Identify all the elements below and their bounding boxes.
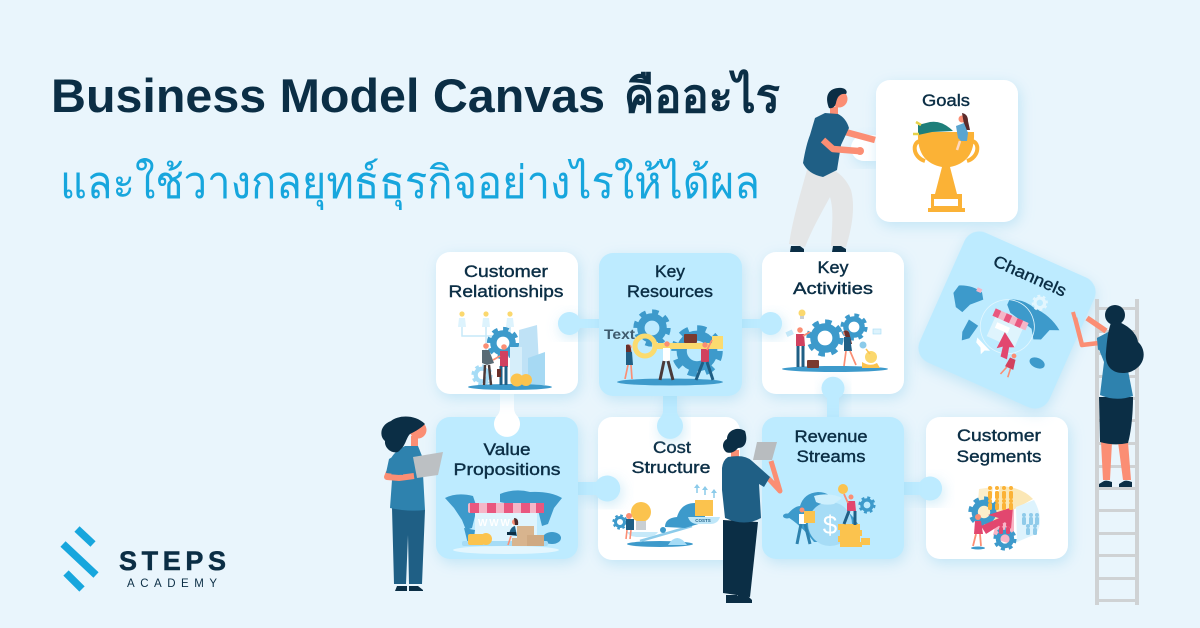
panel: key resources: Key: [655, 263, 686, 281]
panel: value propositions: [436, 417, 620, 559]
logo: Steps Academy: [63, 529, 226, 590]
panel: cost structure: Cost: [653, 439, 691, 457]
title: คืออะไร: [624, 68, 780, 122]
panel: cost structure: [598, 417, 740, 560]
icon: web store on world map: WWW.: [478, 518, 514, 529]
ladder: [1095, 299, 1139, 605]
icon: trophy: [913, 113, 977, 212]
panel: customer relationships: Relationships: [448, 283, 564, 301]
panel: revenue streams: [762, 377, 942, 559]
subtitle: และใช้วางกลยุทธ์ธุรกิจอย่างไรให้ได้ผล: [60, 157, 760, 210]
icon: segments pie: [970, 486, 1040, 550]
panel: channels: Channels: [990, 252, 1069, 301]
person: man pushing goals: [789, 88, 875, 252]
panel: customer relationships: Customer: [464, 263, 549, 281]
logo: Steps Academy: ACADEMY: [127, 578, 217, 590]
icon: money bag: [783, 484, 874, 547]
panel: revenue streams: Streams: [796, 448, 866, 466]
panel: customer segments: Customer: [957, 427, 1042, 445]
panel: goals: Goals: [922, 92, 970, 110]
person: woman on ladder: [1073, 305, 1144, 487]
icon: web store on world map: [445, 490, 562, 554]
panel: key resources: [558, 253, 782, 439]
panel: value propositions: Value: [484, 441, 530, 459]
panel: channels: [913, 226, 1101, 414]
person: woman with book: [381, 416, 443, 591]
icon: world map store: [931, 263, 1070, 389]
panel: value propositions: Propositions: [454, 461, 560, 479]
logo: Steps Academy: STEPS: [119, 546, 226, 576]
panel: revenue streams: Revenue: [794, 428, 868, 446]
panel: cost structure: Structure: [632, 459, 710, 477]
panel: customer segments: Segments: [956, 448, 1042, 466]
panel: customer segments: [926, 417, 1068, 559]
panel: key activities: Activities: [793, 280, 873, 298]
panel: customer relationships: [436, 252, 578, 437]
panel: goals: [851, 80, 1018, 222]
panel: key resources: Resources: [627, 283, 713, 301]
title: Business Model Canvas: [51, 69, 605, 122]
icon: key and gears: [604, 312, 723, 386]
panel: key activities: Key: [818, 259, 849, 277]
icon: gears and team: [782, 310, 888, 372]
person: man with tablet: [722, 429, 780, 603]
panel: key activities: [762, 252, 904, 394]
icon: cost scale: COSTS: [695, 518, 711, 523]
icon: cost scale: [613, 484, 720, 547]
icon: key and gears: Text: [604, 326, 635, 342]
icon: handshake with buildings: [458, 311, 552, 390]
icon: money bag: $: [823, 510, 838, 540]
